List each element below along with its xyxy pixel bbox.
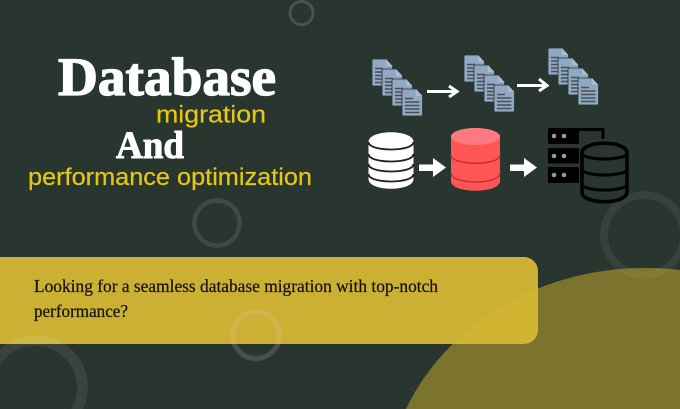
title: Database: Database xyxy=(58,47,276,107)
icon: white database xyxy=(368,132,414,189)
decorative circle: top xyxy=(290,2,313,24)
decorative circle: bottom left xyxy=(0,335,88,409)
subtitle: performance optimization: performance optimization xyxy=(28,164,312,191)
arrow: red db to server xyxy=(510,158,537,177)
icon: server with database xyxy=(548,128,627,202)
decorative circle: over banner xyxy=(232,312,280,358)
banner text: performance? xyxy=(34,301,128,321)
icon: document stack 2 xyxy=(464,55,514,112)
icon: document stack 3 xyxy=(548,48,598,105)
yellow banner panel xyxy=(0,257,538,344)
title: And: And xyxy=(116,124,184,167)
arrow: documents 2 to 3 xyxy=(517,79,547,91)
decorative circle: right xyxy=(600,191,680,279)
icon: document stack 1 xyxy=(372,59,422,116)
subtitle: migration: migration xyxy=(156,102,266,128)
yellow blob, bottom right xyxy=(406,268,680,409)
banner text: Looking for a seamless database migration with top-notch xyxy=(34,276,438,296)
decorative circle: middle xyxy=(194,200,240,246)
icon: red database xyxy=(451,128,500,191)
arrow: white db to red db xyxy=(419,158,446,177)
arrow: documents 1 to 2 xyxy=(427,86,457,97)
